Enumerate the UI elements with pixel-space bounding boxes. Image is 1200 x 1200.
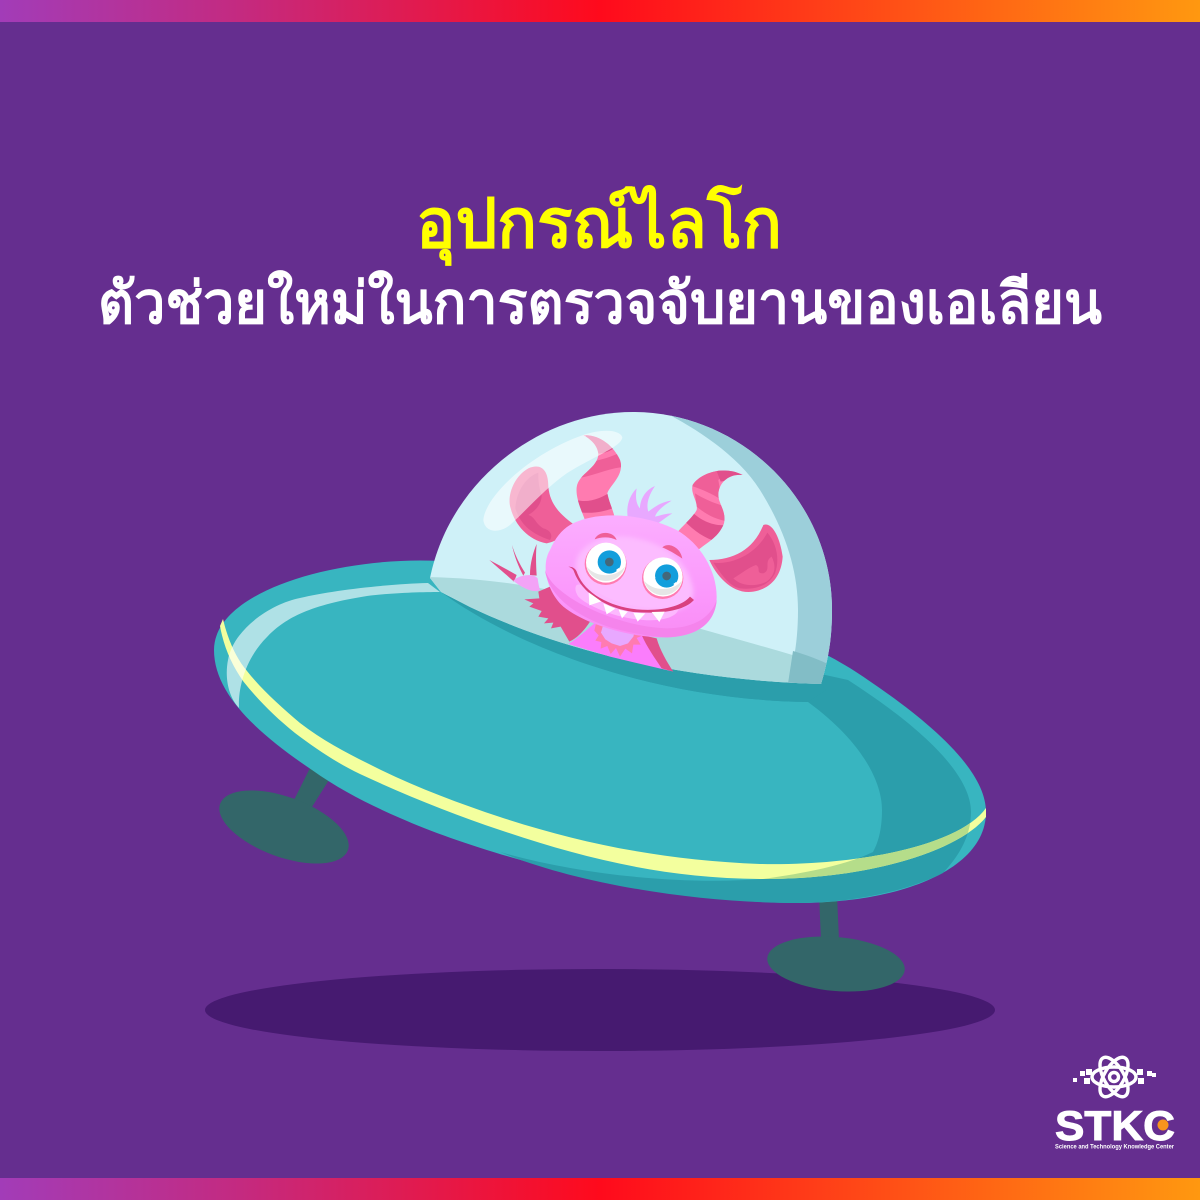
- horn light base: [678, 470, 742, 550]
- iris: [598, 550, 621, 574]
- atom icon: [1092, 1053, 1136, 1101]
- logo tagline: Science and Technology Knowledge Center: [1055, 1144, 1175, 1150]
- glints: [649, 575, 678, 586]
- body shoulder: [642, 635, 673, 672]
- dome right shade: [671, 416, 832, 684]
- left brow: [595, 533, 617, 540]
- fingers: [489, 544, 537, 582]
- head lower rim: [545, 570, 717, 637]
- horn dark band: [578, 494, 612, 513]
- ear folds: [733, 557, 774, 585]
- inner ear: [515, 473, 551, 540]
- left eye: [585, 543, 627, 585]
- eye shade: [644, 581, 682, 595]
- waving hand: [489, 544, 540, 591]
- left ear: [510, 467, 577, 543]
- cheek glow: [575, 585, 678, 620]
- subtitle: ตัวช่วยใหม่ในการตรวจจับยานของเอเลียน: [98, 269, 1102, 336]
- right eye: [642, 557, 683, 599]
- eyeball: [643, 557, 683, 597]
- glints: [591, 560, 621, 572]
- chest fur inner: [601, 627, 636, 646]
- iris: [655, 564, 678, 588]
- title: อุปกรณ์ไลโก: [416, 184, 782, 266]
- eye rim: [585, 543, 627, 585]
- chest fur: [594, 623, 643, 657]
- inner ear: [713, 533, 777, 589]
- glass dome: [430, 412, 832, 684]
- logo orange dot: [1158, 1120, 1168, 1130]
- STKC logo: [1055, 1053, 1175, 1150]
- horn top band: [586, 435, 613, 454]
- pupil: [662, 572, 671, 580]
- horn light base: [576, 435, 621, 519]
- hair tuft: [627, 486, 672, 527]
- right brow: [662, 545, 682, 559]
- top gradient bar: [0, 0, 1200, 22]
- dome fill: [430, 412, 832, 684]
- palm: [513, 575, 540, 591]
- flying saucer: [214, 561, 986, 903]
- alien monster: [483, 430, 783, 672]
- body: [568, 620, 673, 672]
- dome reflection: [483, 431, 622, 531]
- outer ear: [709, 525, 783, 592]
- eye rim: [642, 558, 683, 599]
- eye shade: [587, 567, 625, 581]
- right landing leg: [765, 895, 907, 997]
- stripe in shadow: [764, 823, 970, 879]
- ground shadow: [205, 969, 995, 1051]
- left landing leg: [210, 768, 358, 878]
- bottom gradient bar: [0, 1178, 1200, 1200]
- horn mid band: [695, 494, 724, 521]
- dome lower band: [430, 577, 826, 684]
- pupil: [605, 558, 614, 566]
- teeth: [589, 592, 665, 622]
- centre horn: [576, 435, 621, 519]
- logo wordmark: STKC: [1055, 1102, 1175, 1149]
- horn top band: [716, 470, 742, 482]
- eyeball: [586, 543, 626, 583]
- smile: [568, 567, 694, 613]
- pixel dots: [1073, 1069, 1156, 1084]
- saucer hull: [214, 561, 986, 903]
- saucer front lip under dome: [441, 592, 826, 702]
- rim highlight: [227, 583, 440, 708]
- face patch: [576, 536, 693, 612]
- right horn: [678, 470, 742, 550]
- right ear: [709, 525, 783, 592]
- hull shading: [440, 590, 971, 903]
- arm fur: [524, 587, 591, 642]
- horn dark band: [686, 514, 724, 540]
- yellow stripe: [220, 619, 986, 879]
- head: [546, 515, 717, 637]
- outer ear: [510, 467, 577, 543]
- horn upper band: [692, 470, 726, 498]
- dome corner shade: [788, 651, 826, 684]
- horn mid band: [581, 454, 621, 478]
